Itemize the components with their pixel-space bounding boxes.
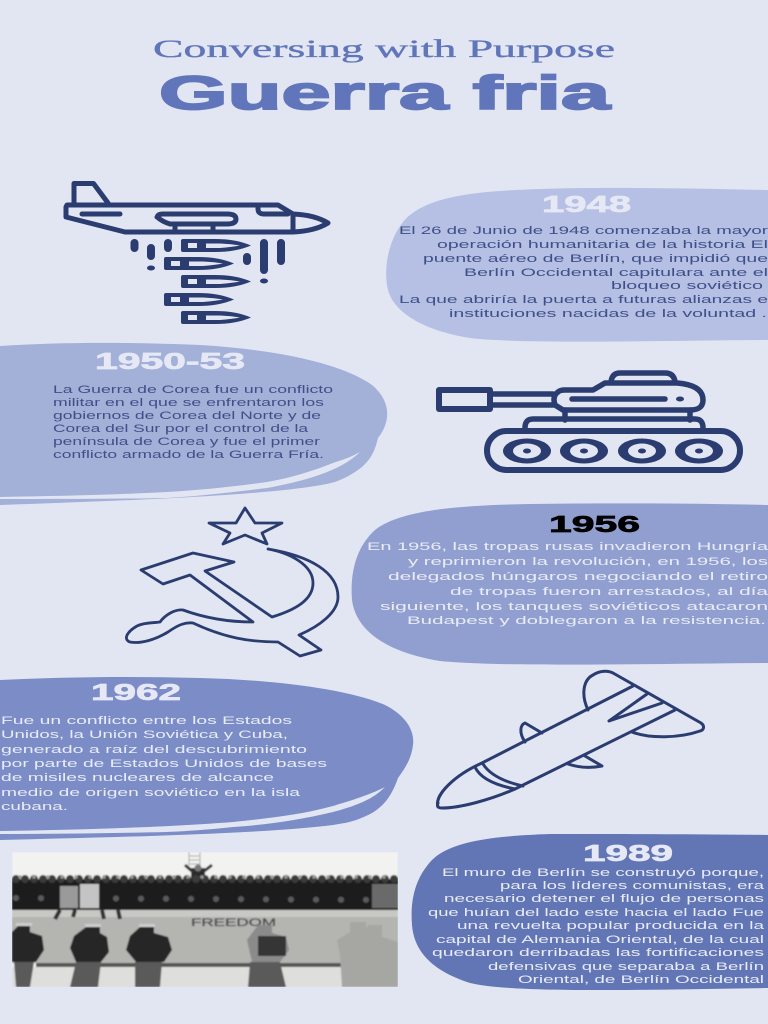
body text 1962 bbox=[1, 715, 328, 813]
body text 1948: puente aéreo de Berlín, que impidió que bbox=[423, 253, 768, 265]
panel: 1962 bbox=[0, 677, 413, 840]
body text 1948: operación humanitaria de la historia El bbox=[437, 239, 768, 251]
body text 1948 bbox=[399, 225, 768, 320]
body text 1948: La que abriría la puerta a futuras alianzas e bbox=[399, 294, 768, 306]
body text 1989 bbox=[428, 867, 765, 986]
body text 1948: El 26 de Junio de 1948 comenzaba la mayor bbox=[399, 225, 768, 237]
body text 1956: de tropas fueron arrestados, al día bbox=[450, 586, 768, 598]
body text 1962: generado a raíz del descubrimiento bbox=[1, 744, 307, 756]
main title: Guerra fria bbox=[159, 66, 612, 119]
body text 1950-53: militar en el que se enfrentaron los bbox=[53, 397, 325, 409]
body text 1950-53: La Guerra de Corea fue un conflicto bbox=[53, 384, 333, 396]
heading 1989: 1989 bbox=[583, 840, 673, 866]
panel: 1948 bbox=[386, 188, 768, 342]
body text 1962: Fue un conflicto entre los Estados bbox=[1, 715, 293, 727]
photo: Berlin wall with soldiers and crowd bbox=[12, 852, 398, 987]
body text 1989: capital de Alemania Oriental, de la cual bbox=[436, 934, 764, 946]
panel: 1989 bbox=[412, 834, 768, 990]
body text 1956: Budapest y doblegaron a la resistencia. bbox=[407, 615, 766, 627]
icon: plane dropping bombs bbox=[66, 184, 328, 324]
body text 1989: Oriental, de Berlín Occidental bbox=[518, 974, 764, 986]
body text 1989: quedaron derribadas las fortificaciones bbox=[432, 947, 765, 959]
body text 1950-53 bbox=[53, 384, 333, 461]
panel shape bbox=[0, 343, 387, 505]
icon: missile bbox=[438, 671, 704, 808]
panel shape bbox=[386, 188, 768, 342]
body text 1989: necesario detener el flujo de personas bbox=[444, 893, 765, 905]
body text 1962: Unidos, la Unión Soviética y Cuba, bbox=[1, 729, 288, 741]
body text 1950-53: Corea del Sur por el control de la bbox=[53, 423, 309, 435]
body text 1989: defensivas que separaba a Berlín bbox=[488, 961, 764, 973]
heading 1950-53: 1950-53 bbox=[95, 348, 245, 374]
heading 1948: 1948 bbox=[542, 191, 631, 217]
panel shape bbox=[352, 503, 768, 665]
body text 1956: siguiente, los tanques soviéticos atacaron bbox=[380, 601, 768, 613]
panel: 1956 bbox=[352, 503, 768, 665]
soldier hats bbox=[16, 923, 155, 927]
panel: 1950-53 bbox=[0, 343, 387, 505]
body text 1948: instituciones nacidas de la voluntad . bbox=[449, 308, 767, 320]
body text 1989: que huían del lado este hacia el lado Fue bbox=[428, 907, 764, 919]
icon: tank bbox=[439, 373, 740, 470]
star bbox=[209, 508, 282, 544]
body text 1962: medio de origen soviético en la isla bbox=[1, 787, 301, 799]
wall graffiti: FREEDOM bbox=[191, 917, 276, 929]
body text 1956 bbox=[367, 541, 768, 627]
body text 1950-53: conflicto armado de la Guerra Fría. bbox=[53, 449, 324, 461]
body text 1948: bloqueo soviético bbox=[611, 280, 763, 292]
body text 1962: de misiles nucleares de alcance bbox=[1, 772, 274, 784]
subtitle: Conversing with Purpose bbox=[153, 36, 615, 63]
dark uniformed soldiers bbox=[12, 926, 172, 962]
title block bbox=[153, 36, 615, 119]
soldier legs bbox=[14, 962, 286, 987]
swoosh highlight bbox=[0, 452, 360, 499]
panel shape bbox=[412, 834, 768, 990]
hammer and sickle outline bbox=[126, 549, 338, 656]
heading 1956: 1956 bbox=[549, 511, 640, 537]
icon: hammer and sickle with star bbox=[126, 508, 338, 656]
panel shape bbox=[0, 677, 413, 840]
body text 1989: una revuelta popular producida en la bbox=[457, 920, 765, 932]
body text 1989: para los líderes comunistas, era bbox=[500, 880, 765, 892]
body text 1989: El muro de Berlín se construyó porque, bbox=[442, 867, 764, 879]
body text 1950-53: gobiernos de Corea del Norte y de bbox=[53, 410, 321, 422]
body text 1962: por parte de Estados Unidos de bases bbox=[1, 758, 328, 770]
light uniformed soldiers bbox=[247, 925, 289, 962]
body text 1956: delegados húngaros negociando el retiro bbox=[388, 571, 768, 583]
body text 1948: Berlín Occidental capitulara ante el bbox=[464, 267, 768, 279]
swoosh highlight bbox=[0, 787, 385, 834]
body text 1956: En 1956, las tropas rusas invadieron Hungría bbox=[367, 541, 768, 553]
body text 1956: y reprimieron la revolución, en 1956, los bbox=[408, 556, 768, 568]
body text 1950-53: península de Corea y fue el primer bbox=[53, 436, 320, 448]
heading 1962: 1962 bbox=[91, 679, 181, 705]
body text 1962: cubana. bbox=[1, 801, 68, 813]
